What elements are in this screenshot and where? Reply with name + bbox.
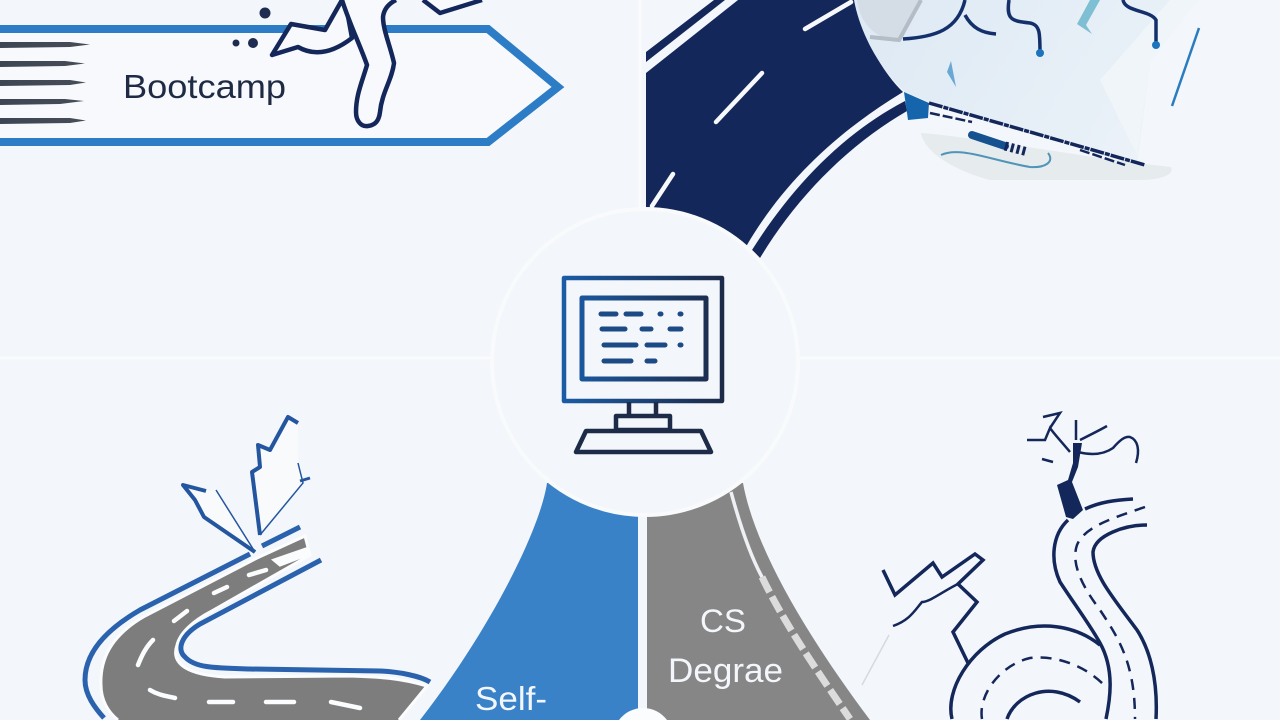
stand xyxy=(616,402,670,430)
circuit nodes xyxy=(1036,41,1160,57)
bootcamp label: Bootcamp xyxy=(123,68,286,105)
lane dashes xyxy=(652,2,851,206)
lane dashes xyxy=(138,570,360,708)
motion dots xyxy=(232,8,270,48)
road dashes xyxy=(762,577,850,719)
center dashes xyxy=(1075,507,1145,719)
coil outer xyxy=(951,626,1100,719)
icon: translucent chip device xyxy=(854,0,1200,180)
road edge stripes xyxy=(646,0,725,62)
crack shards xyxy=(183,417,303,552)
circuit traces xyxy=(903,0,1156,53)
panel: navy highway xyxy=(646,0,907,300)
gray facet xyxy=(857,0,921,42)
panel: cs degree road xyxy=(647,483,870,720)
stylus on shadow xyxy=(972,135,1005,146)
road blue edges xyxy=(85,527,430,718)
panel: self-taught road xyxy=(420,483,638,720)
arrow outline xyxy=(0,29,558,142)
road right edge xyxy=(1093,525,1156,719)
screen outer xyxy=(564,278,722,401)
code lines xyxy=(601,314,681,361)
central circle xyxy=(492,209,798,515)
road edge line xyxy=(731,492,762,577)
coil inner xyxy=(1007,691,1080,719)
coil dashes xyxy=(982,657,1105,719)
road top edge xyxy=(1085,499,1133,509)
cliff lower edge xyxy=(893,584,958,626)
panel: winding gray road xyxy=(85,417,430,720)
runner figure xyxy=(272,0,482,126)
cs degree label xyxy=(668,603,783,690)
road surface xyxy=(101,536,427,720)
dashed base edge xyxy=(929,103,1145,165)
bottom white node xyxy=(619,708,667,720)
blue accents xyxy=(1172,28,1199,106)
self label: Self- xyxy=(475,680,547,717)
panel: bootcamp path xyxy=(0,0,558,142)
screen inner xyxy=(582,298,706,379)
device body xyxy=(854,0,1170,165)
blue corner xyxy=(904,92,929,120)
icon: bare tree xyxy=(1027,413,1138,519)
torn end highlight xyxy=(274,549,309,565)
speed lines xyxy=(0,42,90,124)
teal accent xyxy=(1077,0,1100,34)
cs degree label: CS xyxy=(700,603,746,639)
fading line xyxy=(862,635,889,685)
keyboard base xyxy=(576,431,711,452)
panel: broken navy line road xyxy=(862,413,1156,719)
ground shadow xyxy=(921,133,1172,180)
road surface xyxy=(420,483,638,720)
road left edge xyxy=(1054,520,1110,719)
road surface xyxy=(646,0,903,300)
icon: computer monitor xyxy=(564,278,722,452)
road surface xyxy=(647,483,870,720)
cliff outline xyxy=(883,554,983,663)
cs degree label: Degrae xyxy=(668,652,783,690)
